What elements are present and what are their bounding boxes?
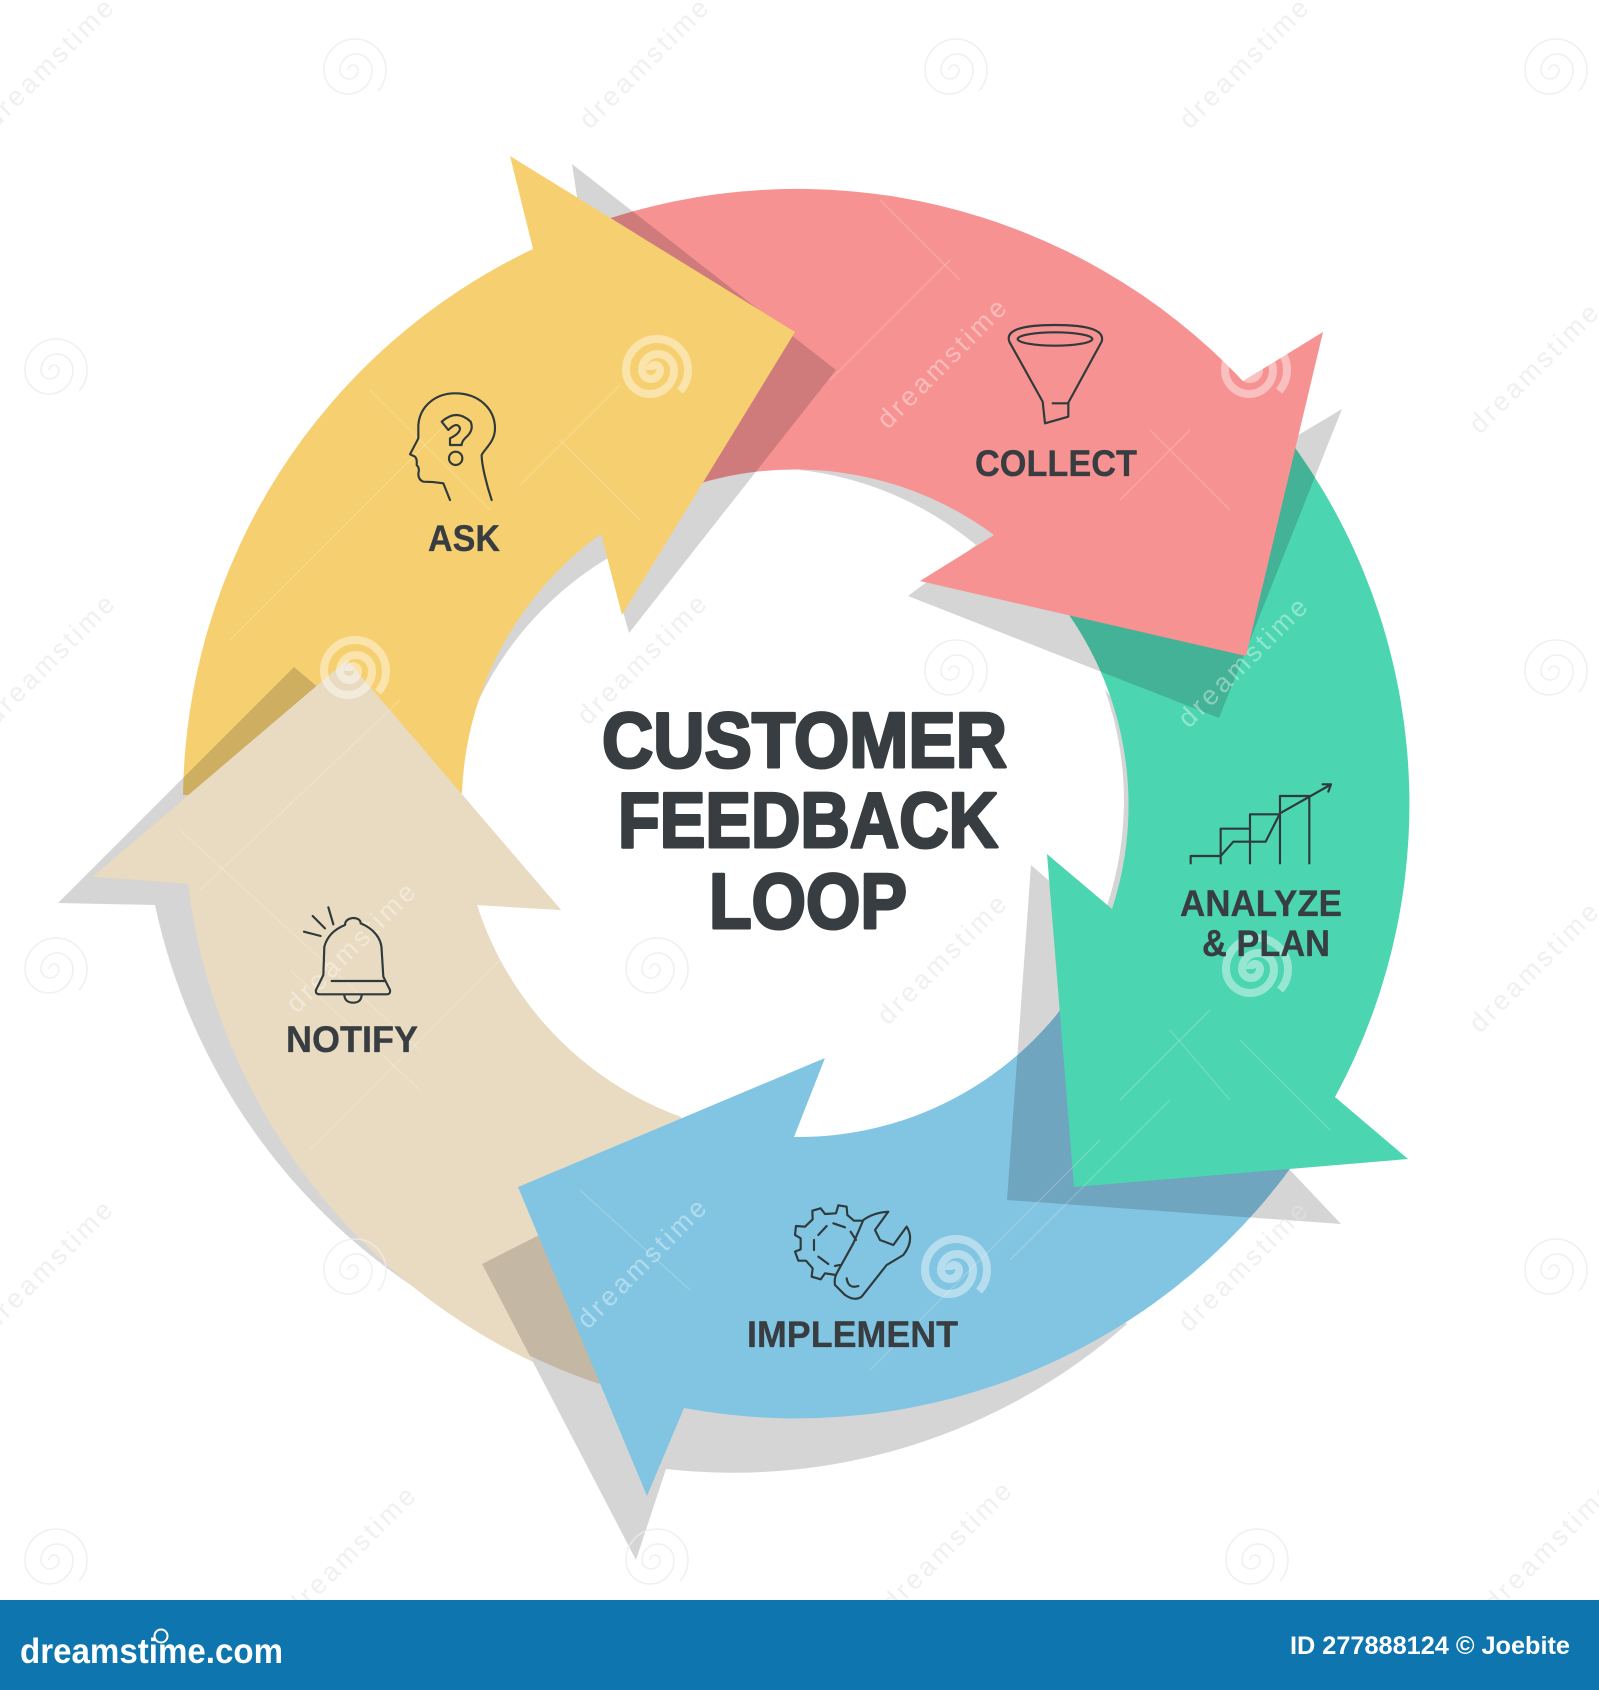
watermark text: dreamstime (871, 293, 1012, 434)
step: ask (410, 393, 500, 559)
icon: head with question mark (410, 393, 495, 500)
arrow: notify head over ask (92, 660, 681, 1362)
label: ask: ASK (428, 518, 500, 559)
step: notify (286, 907, 418, 1060)
watermark text: dreamstime (1172, 1196, 1313, 1337)
arrow: analyze and plan (1047, 415, 1409, 1187)
shadow: notify arrow (58, 667, 434, 1300)
title: LOOP (709, 857, 907, 945)
step: implement (747, 1205, 958, 1355)
icon: rising steps chart (1191, 784, 1331, 863)
watermark lines (180, 200, 1330, 1370)
arrow: implement (518, 990, 1310, 1496)
arrow: ask (183, 156, 795, 795)
label: notify: NOTIFY (286, 1019, 418, 1060)
step: analyze and plan (1180, 784, 1342, 964)
icon: gear and wrench (795, 1205, 910, 1299)
label: collect: COLLECT (975, 443, 1137, 484)
label: implement: IMPLEMENT (747, 1314, 958, 1355)
watermark text: dreamstime (270, 293, 411, 434)
label: analyze and plan: & PLAN (1202, 923, 1330, 964)
watermark text: dreamstime (280, 1481, 421, 1622)
icon: bell (304, 907, 390, 1003)
image id and credit: ID 277888124 © Joebite (1290, 1632, 1570, 1660)
title (602, 696, 1007, 945)
label: analyze and plan (1180, 883, 1342, 964)
icon: logo spiral (154, 1630, 168, 1642)
title: FEEDBACK (618, 776, 998, 864)
arrow: collect (590, 189, 1323, 656)
label: analyze and plan: ANALYZE (1180, 883, 1342, 924)
icon: funnel (1009, 325, 1102, 423)
shadow: implement arrow (482, 1180, 1127, 1560)
watermark text: dreamstime (871, 889, 1012, 1030)
shadow: collect arrow (800, 300, 1342, 718)
shadow: analyze arrow (1007, 690, 1341, 1224)
title: CUSTOMER (602, 696, 1007, 784)
shadow: ask arrow (468, 164, 836, 725)
watermark text: dreamstime (571, 1193, 712, 1334)
footer band (0, 1600, 1599, 1690)
arrow: notify body (92, 660, 700, 1384)
watermark text: dreamstime (571, 589, 712, 730)
watermark text: dreamstime (876, 1476, 1017, 1617)
footer logo text: dreamstime.com (20, 1632, 283, 1671)
step: collect (975, 325, 1137, 484)
watermark text: dreamstime (280, 877, 421, 1018)
watermark text: dreamstime (1172, 592, 1313, 733)
